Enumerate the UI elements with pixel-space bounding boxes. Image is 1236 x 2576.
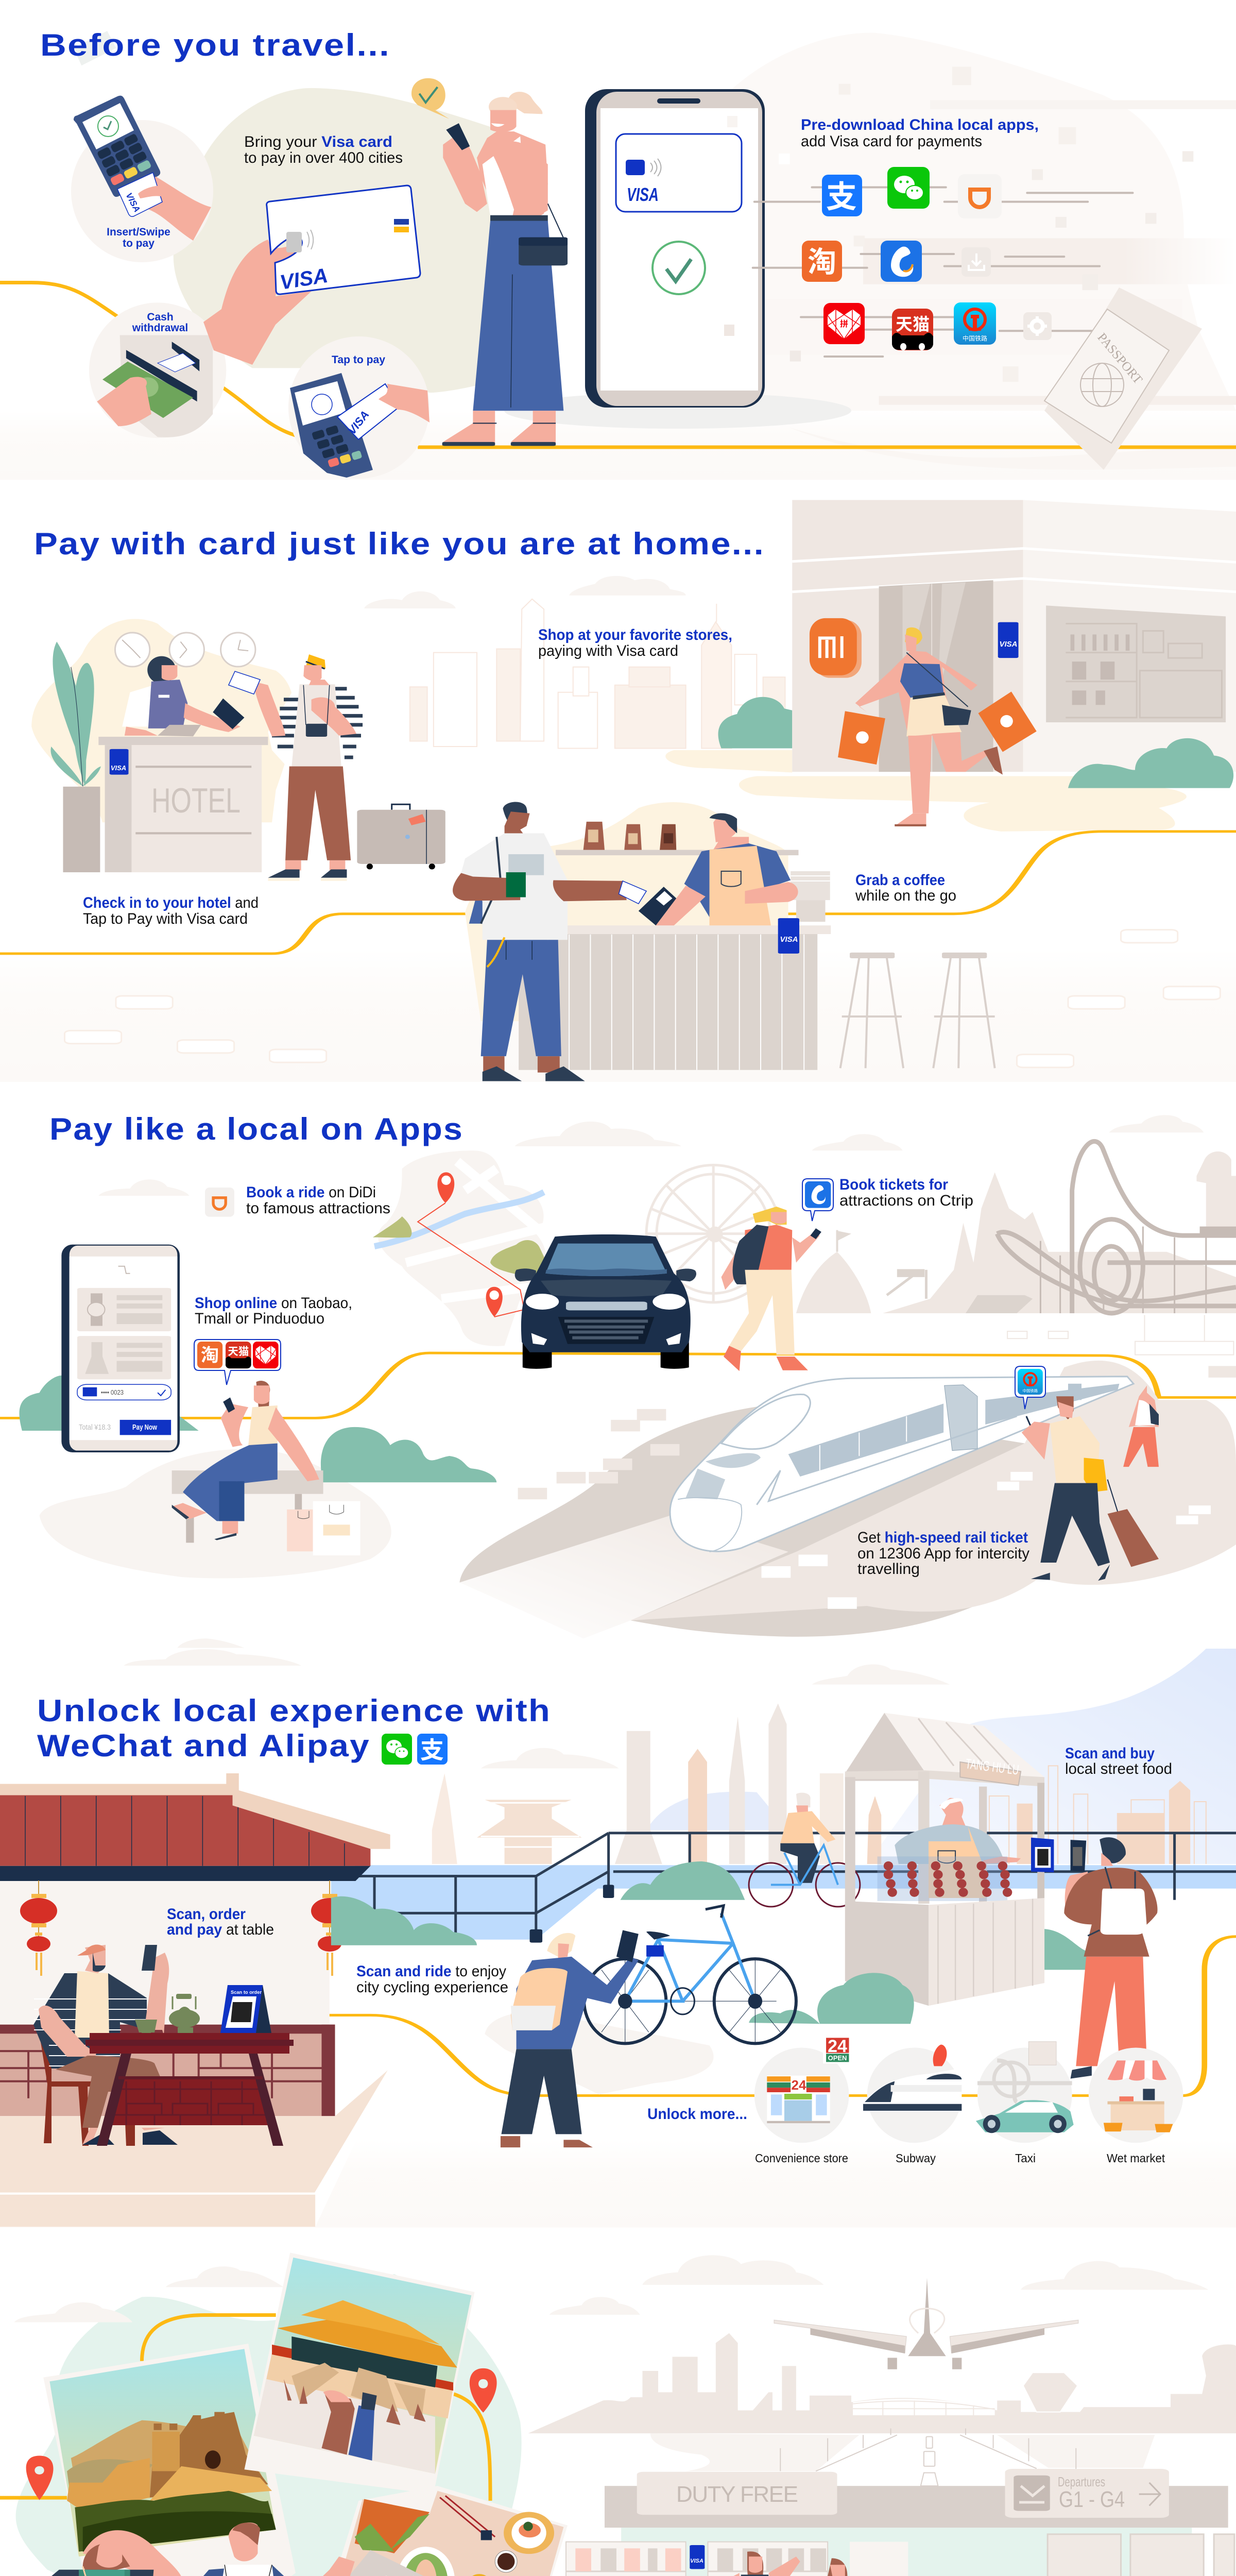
caption: taxi: Taxi xyxy=(1015,2151,1036,2165)
app bubble: 12306 xyxy=(1015,1366,1045,1409)
phone with visa card added xyxy=(585,89,765,408)
icon: Pinduoduo xyxy=(823,303,865,344)
duty free store xyxy=(566,2469,1234,2576)
text: tmall or pinduoduo: Tmall or Pinduoduo xyxy=(195,1310,324,1327)
woman tourist with backpack xyxy=(721,1207,821,1371)
lantern pair right xyxy=(311,1880,348,1976)
water and railing xyxy=(331,1833,1236,1970)
journey line xyxy=(0,283,1236,447)
visa card on screen: VISA xyxy=(627,184,659,205)
woman on bench with bags xyxy=(40,1381,496,1578)
hotel check-in scene xyxy=(31,619,445,881)
text: local street food: local street food xyxy=(1065,1760,1172,1777)
phone shopping screen xyxy=(19,1245,199,1452)
cyclist on bridge xyxy=(749,1793,860,1907)
text: unlock more: Unlock more... xyxy=(647,2106,747,2123)
text: pay in 400 cities: to pay in over 400 cities xyxy=(244,149,403,166)
text: pay now button: Pay Now xyxy=(132,1423,157,1432)
text: book a ride: Book a ride on DiDi xyxy=(246,1184,376,1201)
man seated xyxy=(33,1944,178,2145)
text: visa sign at coffee bar: VISA xyxy=(780,935,798,944)
vendor xyxy=(895,1798,1021,1898)
saved visa pill xyxy=(77,1384,171,1400)
journey line xyxy=(0,2315,1230,2576)
text: duty free sign: DUTY FREE xyxy=(676,2482,798,2507)
man with camera xyxy=(174,2522,355,2576)
polaroid: great wall xyxy=(43,2344,296,2576)
icon: Taobao xyxy=(802,241,842,282)
receptionist xyxy=(122,656,244,736)
bushes near shop xyxy=(718,697,792,748)
icon: Taobao: 淘 xyxy=(808,246,836,278)
text: visa sign on door: VISA xyxy=(999,640,1018,649)
text: gates: G1 - G4 xyxy=(1059,2487,1125,2512)
icon: Mi logo xyxy=(810,618,862,678)
couple in photo xyxy=(284,2379,426,2461)
text: famous attractions: to famous attractions xyxy=(246,1200,390,1217)
coffee bar scene xyxy=(453,802,995,1081)
text: departures label: Departures xyxy=(1058,2474,1105,2489)
shelves xyxy=(566,2542,828,2576)
icon: Tmall xyxy=(892,309,933,350)
background blob, clouds and band xyxy=(0,2255,1236,2576)
journey line xyxy=(0,1937,1236,2096)
cyclist person with bike xyxy=(485,1906,1183,2147)
text: check in at hotel: Check in to your hotel and xyxy=(83,894,259,911)
lantern pair left xyxy=(20,1880,57,1976)
tea table xyxy=(85,2033,294,2146)
text: store 24: 24 xyxy=(792,2077,806,2093)
icon: Alipay heading badge xyxy=(417,1734,448,1765)
icon: 12306 China Railway xyxy=(954,302,996,345)
man scanning with backpack xyxy=(1064,1837,1158,2079)
section: destinations and duty free xyxy=(0,2252,1236,2576)
journey line xyxy=(0,832,1236,954)
text: scan order pay: Scan, order xyxy=(167,1906,246,1923)
shopping bags xyxy=(287,1501,360,1555)
heading: before you travel: Before you travel... xyxy=(40,28,390,62)
text: visa sign at duty free: VISA xyxy=(690,2558,703,2564)
icon: subway train xyxy=(863,2045,962,2111)
text: pre-download apps: Pre-download China local apps, xyxy=(801,116,1039,133)
text: bring your visa card: Bring your Visa card xyxy=(244,133,392,150)
scan to order sign xyxy=(220,1985,271,2033)
icon: Taobao small: 淘 xyxy=(201,1345,219,1365)
traveller woman with phone xyxy=(442,92,568,446)
blue share bike xyxy=(584,1906,796,2043)
caption: wet market: Wet market xyxy=(1107,2151,1165,2165)
app bubble: 12306: 中国铁路 xyxy=(1023,1388,1038,1393)
caption: subway: Subway xyxy=(896,2151,936,2165)
shopping women with bags xyxy=(674,2551,899,2576)
text: travelling: travelling xyxy=(857,1561,920,1578)
stall counter xyxy=(845,1898,1044,2006)
airport skyline xyxy=(528,2333,1236,2486)
text: scan to order small: Scan to order xyxy=(231,1990,262,1995)
icon: wet market xyxy=(1104,2060,1173,2132)
passport: PASSPORT xyxy=(1094,331,1145,387)
icon: download xyxy=(962,247,991,277)
text: on 12306 app: on 12306 App for intercity xyxy=(857,1545,1029,1562)
map pin left xyxy=(26,2455,54,2500)
speed lines behind apps xyxy=(753,188,1132,357)
icon: taxi xyxy=(976,2042,1074,2133)
section: pay like a local on apps xyxy=(0,1112,1236,1648)
speech bubble with check xyxy=(411,78,449,119)
text: attractions on Ctrip: attractions on Ctrip xyxy=(839,1192,973,1209)
journey line xyxy=(0,1353,1236,1418)
man at table with tea xyxy=(33,1944,294,2146)
sky wash and clouds xyxy=(0,1649,1236,2228)
panel: tap to pay xyxy=(288,336,430,479)
visa card on screen xyxy=(616,134,742,212)
map pins xyxy=(437,1172,454,1203)
text: insert swipe label: to pay xyxy=(123,238,154,249)
panel: insert or swipe to pay xyxy=(71,31,213,262)
icon: Alipay heading badge: 支 xyxy=(420,1737,444,1764)
polaroid: forbidden city xyxy=(244,2252,474,2494)
rail scene ground xyxy=(459,1361,1236,1638)
text: card digits: •••• 0023 xyxy=(101,1388,124,1396)
text: tap label: Tap to pay xyxy=(332,354,385,366)
icon: Pinduoduo: 拼 xyxy=(840,319,848,329)
heading: pay like a local: Pay like a local on Apps xyxy=(49,1112,464,1146)
potted plant xyxy=(50,642,101,872)
heading: pay with card: Pay with card just like you are at home... xyxy=(34,527,765,561)
clouds and skyline xyxy=(364,576,785,748)
app bubble: Ctrip xyxy=(802,1179,833,1221)
street food stall xyxy=(749,1713,1054,2024)
section: before you travel xyxy=(0,28,1236,480)
visa accepted sign xyxy=(998,622,1019,658)
reception desk xyxy=(98,737,268,872)
icon: settings gear xyxy=(1023,312,1052,340)
suitcase xyxy=(357,804,445,869)
bushes right xyxy=(1068,738,1233,788)
two tourists in foreground xyxy=(17,2522,355,2576)
app bubble: shopping apps xyxy=(194,1340,281,1385)
app icons: local apps grid xyxy=(802,167,1052,350)
icon: Alipay: 支 xyxy=(826,180,857,214)
scan to pay sign xyxy=(1031,1838,1054,1872)
text: book tickets: Book tickets for xyxy=(839,1176,948,1193)
icon: 12306 China Railway: 中国铁路 xyxy=(963,334,987,342)
woman in overalls xyxy=(17,2530,183,2576)
text: hotel sign: HOTEL xyxy=(151,781,241,820)
text: get rail ticket: Get high-speed rail ticket xyxy=(857,1529,1028,1546)
green bush by water xyxy=(331,1896,477,1945)
high speed train xyxy=(670,1377,1134,1552)
text: city cycling: city cycling experience xyxy=(356,1979,508,1996)
icon: Tmall small xyxy=(226,1342,251,1368)
icon: Pinduoduo small xyxy=(253,1342,279,1368)
passport xyxy=(1044,287,1202,470)
chair xyxy=(37,2020,135,2146)
icon: Taobao small xyxy=(197,1342,222,1368)
text: scan and ride: Scan and ride to enjoy xyxy=(356,1963,506,1980)
text: shop at stores: Shop at your favorite stores, xyxy=(538,626,732,643)
heading: unlock local experience line one: Unlock local experience with xyxy=(37,1693,551,1728)
confirmation check xyxy=(653,242,705,294)
barista xyxy=(656,814,798,925)
phone shadow xyxy=(504,393,851,429)
shopper woman with bags xyxy=(838,628,1037,826)
heading: unlock local experience line two: WeChat and Alipay xyxy=(37,1728,370,1763)
background washes xyxy=(0,33,1236,480)
icon: Tmall small: 天猫 xyxy=(228,1346,249,1358)
text: scan and buy: Scan and buy xyxy=(1065,1745,1155,1762)
menu paper xyxy=(331,2550,453,2576)
text: add visa card: add Visa card for payments xyxy=(801,133,982,150)
hand holding visa card xyxy=(203,185,420,365)
text: open 24 sign: 24 xyxy=(828,2037,847,2056)
amusement park backdrop xyxy=(646,1141,1236,1378)
red lanterns xyxy=(20,1880,348,1976)
counter xyxy=(519,918,831,1070)
text: paying with visa: paying with Visa card xyxy=(538,642,678,659)
tanghulu skewers xyxy=(884,1861,1012,1897)
text: grab a coffee: Grab a coffee xyxy=(855,872,945,889)
text: tap to pay at hotel: Tap to Pay with Visa card xyxy=(83,910,248,927)
text: visa sign at hotel: VISA xyxy=(111,764,126,772)
icon: DiDi xyxy=(958,174,1002,218)
text: open label: OPEN xyxy=(828,2054,847,2062)
icon: Ctrip xyxy=(881,241,922,282)
customer with coffee xyxy=(453,802,646,1081)
panel: cash withdrawal xyxy=(89,302,226,438)
terminal on counter xyxy=(639,887,676,925)
peach skyline xyxy=(432,1703,1206,1864)
hand holding visa card: VISA xyxy=(279,264,330,294)
tea set xyxy=(135,1994,200,2035)
panel: insert or swipe to pay: VISA xyxy=(124,191,142,214)
cream ground blobs xyxy=(665,750,1187,832)
text: insert swipe label: Insert/Swipe xyxy=(107,226,170,238)
beige backdrop shape xyxy=(174,88,505,393)
keypad xyxy=(97,133,152,186)
icon: convenience store xyxy=(767,2035,851,2123)
text: insert swipe label xyxy=(107,226,170,249)
car xyxy=(515,1234,696,1369)
polaroid: chinese food xyxy=(307,2486,568,2576)
unlock more bubbles xyxy=(754,2047,1183,2143)
text: cash label: Cash xyxy=(147,311,174,323)
shop building xyxy=(792,500,1236,772)
woman in orange xyxy=(796,2558,889,2576)
icon: Alipay xyxy=(822,175,862,216)
text: tang hu lu sign: TANG HU LU xyxy=(965,1756,1020,1778)
section: unlock local experience xyxy=(0,1649,1236,2228)
icon: WeChat heading badge xyxy=(382,1734,412,1765)
background band and bricks xyxy=(0,930,1236,1082)
map pin right xyxy=(470,2368,497,2413)
text: cash label xyxy=(132,311,188,334)
orange shopping bags xyxy=(838,691,1037,765)
person scanning bike xyxy=(501,1930,639,2147)
text: on the go: while on the go xyxy=(855,887,956,904)
temple restaurant xyxy=(0,1773,390,2227)
espresso machine xyxy=(791,871,830,922)
app bubble: DiDi xyxy=(205,1188,234,1217)
product cards xyxy=(77,1288,171,1331)
departure windows and train xyxy=(1048,2534,1234,2576)
traveller with suitcase xyxy=(1022,1385,1159,1581)
icon: Tmall: 天猫 xyxy=(896,315,930,334)
clouds xyxy=(98,1115,1204,1648)
airplane xyxy=(774,2278,1078,2369)
tourist with striped jacket xyxy=(229,654,363,881)
wall clocks xyxy=(115,633,255,667)
caption: convenience store: Convenience store xyxy=(755,2151,848,2165)
text: pay at table: and pay at table xyxy=(167,1921,274,1938)
section: pay with card at home xyxy=(0,500,1236,1082)
text: shop online: Shop online on Taobao, xyxy=(195,1295,352,1312)
city map with route xyxy=(373,1150,552,1346)
icon: WeChat xyxy=(887,167,930,209)
coffee bags xyxy=(583,822,676,850)
panel: tap to pay: VISA xyxy=(345,408,372,437)
woman with suitcase xyxy=(674,2551,800,2576)
bar stools xyxy=(840,953,995,1068)
text: cash label: withdrawal xyxy=(132,322,188,334)
text: order total: Total ¥18.3 xyxy=(79,1423,111,1432)
